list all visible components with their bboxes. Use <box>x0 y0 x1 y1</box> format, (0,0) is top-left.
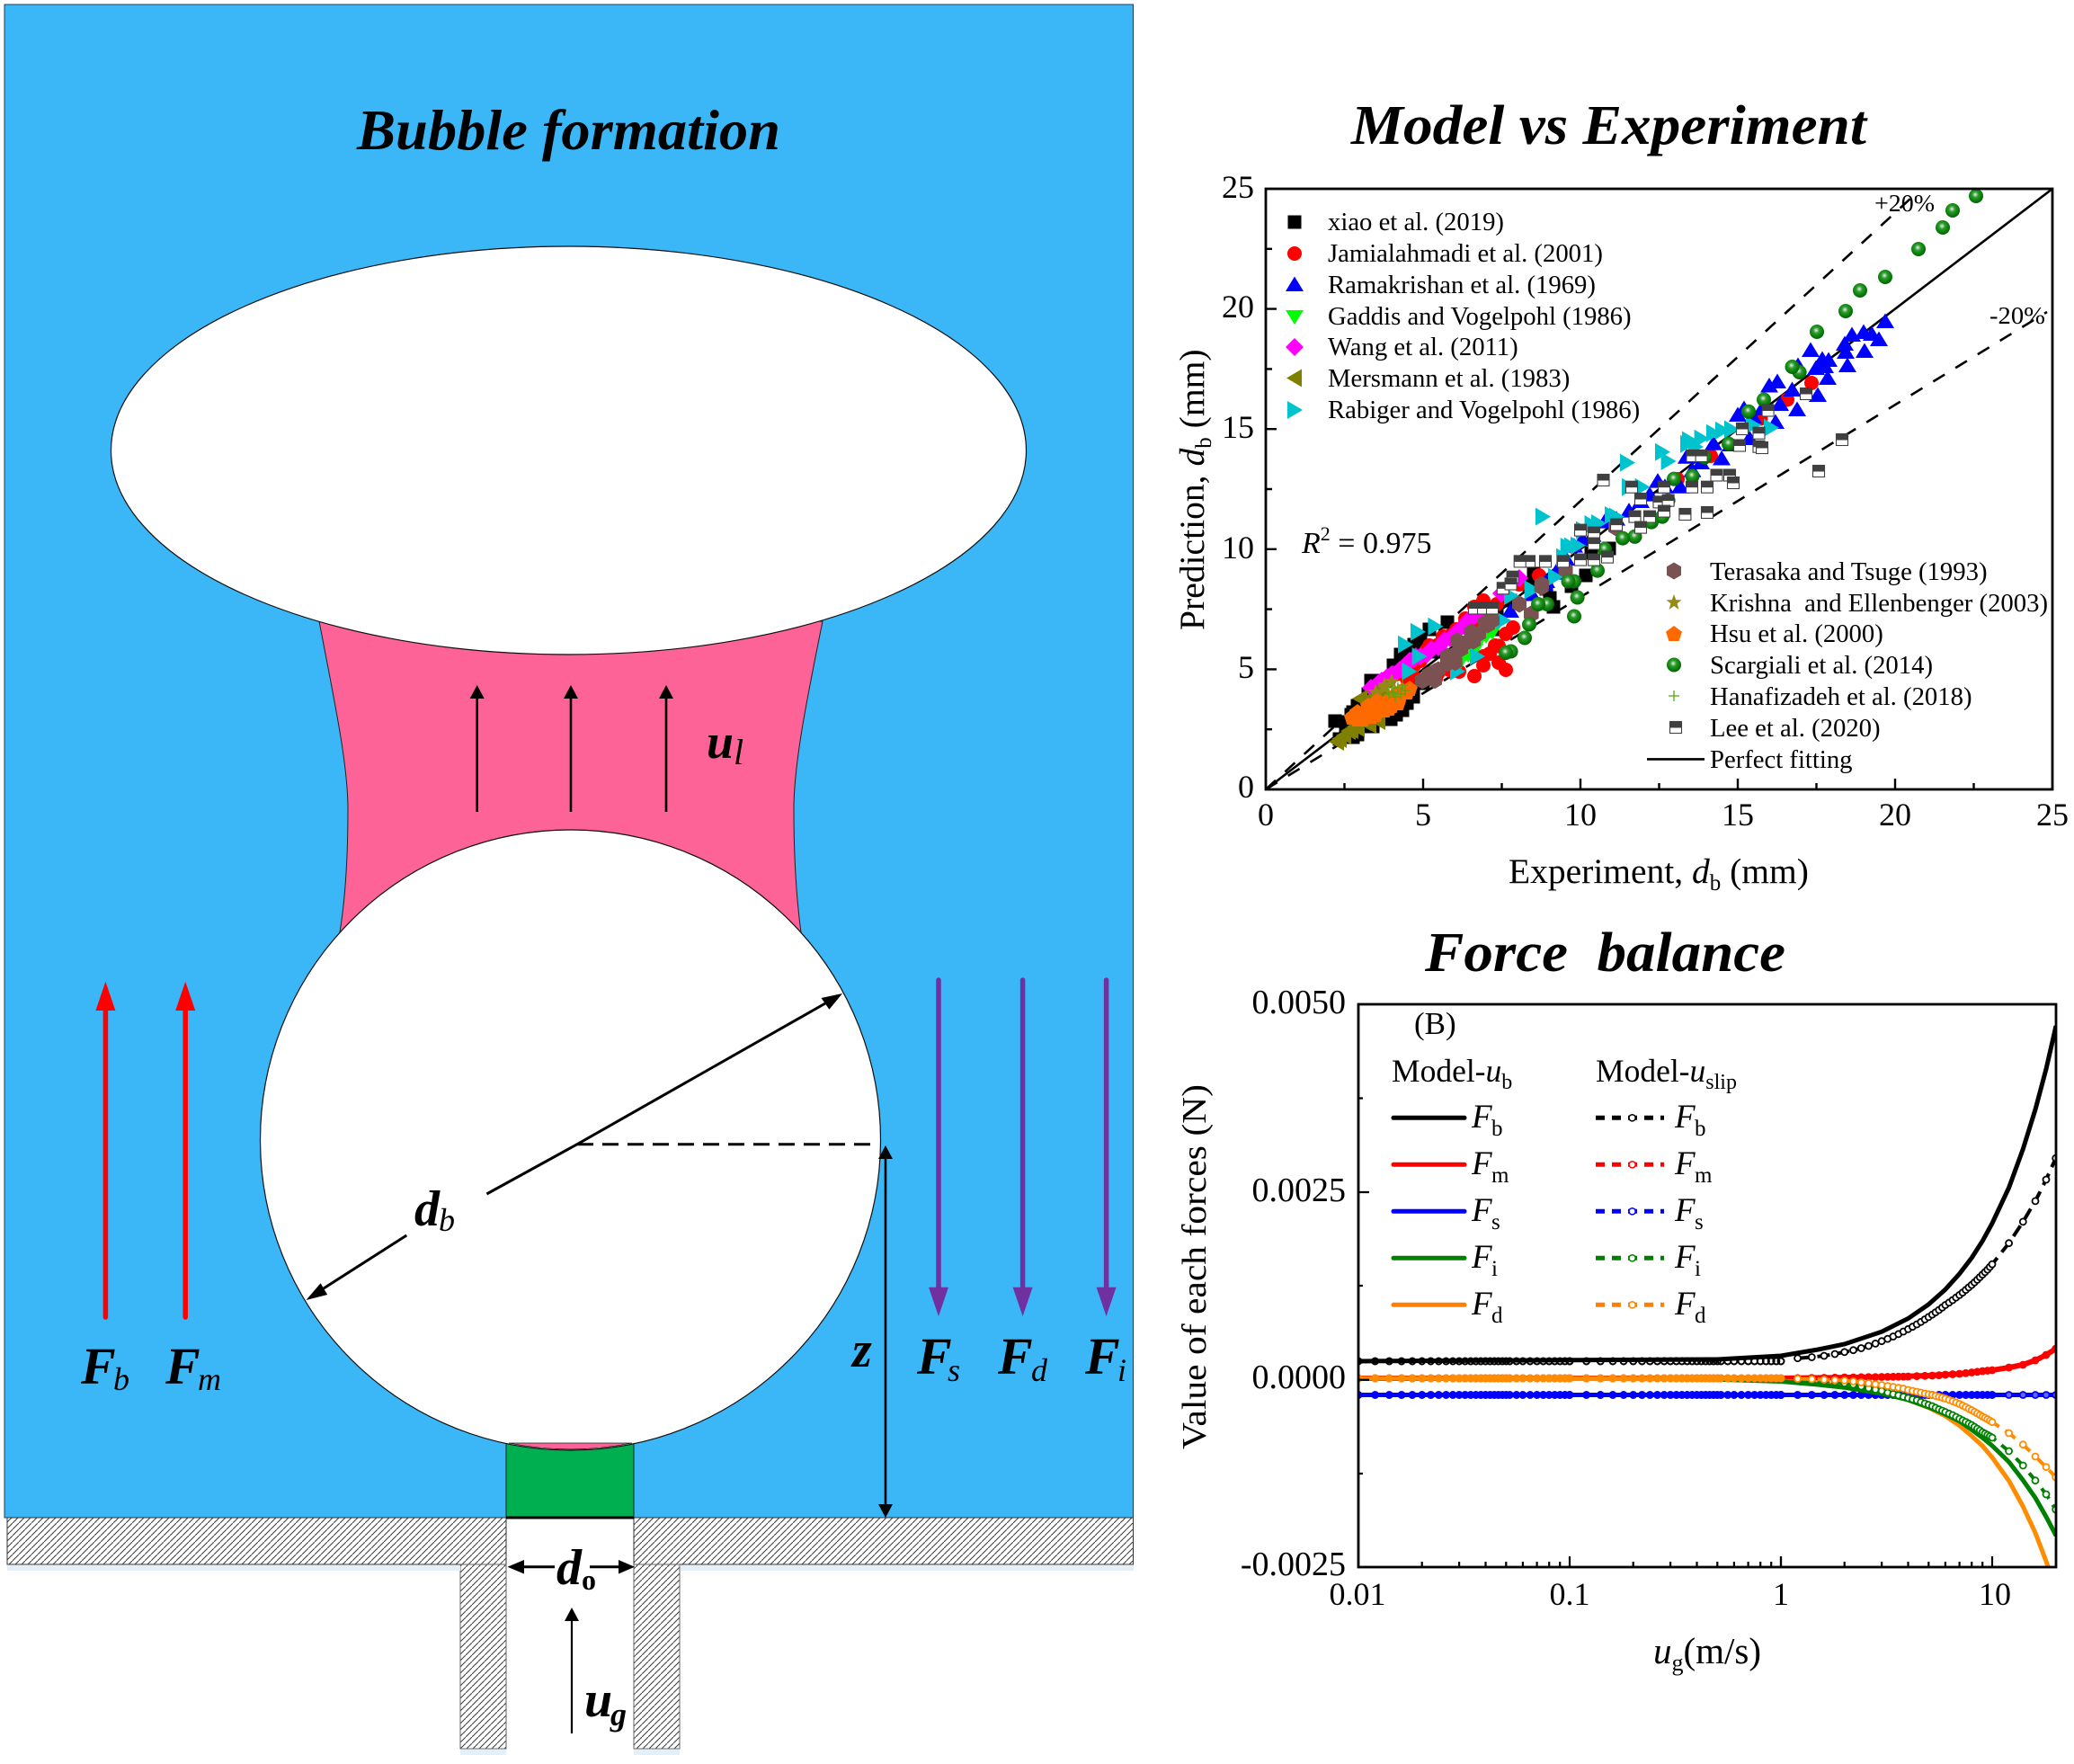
legend: solid lines: F <box>1471 1239 1492 1276</box>
axes frame and ticks <box>1358 1004 2056 1567</box>
series: Hanafizadeh et al. <box>1389 685 1405 697</box>
curve: F_s model-uslip <box>1356 1392 2056 1398</box>
series: Mersmann et al. <box>1337 690 1380 742</box>
y tick labels: 0.0000 <box>1251 1359 1346 1396</box>
curve: F_m model-uslip <box>1356 1349 2056 1381</box>
orifice base line <box>506 1516 634 1519</box>
arrow: orifice diameter <box>507 1560 635 1573</box>
curve: F_d model-ub <box>1379 1379 2050 1566</box>
x axis title: g <box>1672 1650 1683 1676</box>
curve: F_b model-ub <box>1358 1026 2056 1361</box>
x axis title: u <box>1653 1630 1672 1671</box>
x axis title: Experiment, d <box>1509 851 1710 891</box>
label: u_g: u <box>584 1672 612 1728</box>
dashed bubble radius <box>577 1143 872 1145</box>
scatter chart: model vs experiment <box>1172 169 2069 895</box>
pink lens at orifice <box>509 1443 632 1449</box>
liquid film neck <box>319 621 823 932</box>
legend: upper left: xiao et al. (2019) <box>1328 208 1504 236</box>
legend: solid lines: F <box>1471 1286 1492 1323</box>
arrows: F_b and F_m upward forces <box>95 982 195 1317</box>
curve: F_i model-uslip <box>1798 1379 2056 1510</box>
legend: dashed lines with circles: m <box>1695 1163 1713 1188</box>
label: u_g: g <box>610 1697 627 1733</box>
panel: bubble formation schematic <box>4 4 1134 1752</box>
legend: dashed lines with circles: F <box>1674 1286 1696 1323</box>
label: +20%: +20% <box>1874 190 1935 217</box>
gas inlet green region <box>506 1443 634 1518</box>
x tick labels <box>1258 797 2069 833</box>
label: -20%: -20% <box>1989 302 2045 329</box>
curve: F_d model-uslip <box>1356 1376 2056 1477</box>
legend: dashed lines with circles: s <box>1695 1210 1704 1234</box>
label: F_b: b <box>113 1361 129 1397</box>
label: d_o: d <box>556 1540 583 1596</box>
x tick labels <box>1329 1576 2011 1612</box>
y axis title: b <box>1192 437 1216 449</box>
legend: dashed lines with circles: b <box>1695 1117 1706 1141</box>
label: F_i: i <box>1117 1352 1126 1388</box>
legend: solid lines: F <box>1471 1192 1492 1229</box>
arrow: height z <box>878 1145 893 1518</box>
legend heading: Model-ub: b <box>1501 1071 1512 1094</box>
series: Scargiali et al. <box>1506 196 1976 653</box>
y axis title: (mm) <box>1172 349 1212 437</box>
arrows: liquid velocity <box>470 685 673 812</box>
x axis title: (m/s) <box>1683 1630 1761 1671</box>
legend: dashed lines with circles: d <box>1695 1304 1706 1328</box>
label: F_i: F <box>1084 1327 1120 1385</box>
legend: dashed lines with circles: F <box>1674 1192 1696 1229</box>
label: F_m: m <box>198 1361 221 1397</box>
legend: lower right: Hanafizadeh et al. (2018) <box>1710 682 1972 711</box>
legend: upper left: Ramakrishan et al. (1969) <box>1328 271 1596 299</box>
legend: lower right: Hsu et al. (2000) <box>1710 619 1883 648</box>
y tick labels: 0.0025 <box>1251 1172 1346 1209</box>
legend heading: Model-uslip: Model-u <box>1596 1053 1705 1089</box>
wall: plate right <box>634 1518 1133 1564</box>
legend: lower right: Scargiali et al. (2014) <box>1710 651 1933 680</box>
label: u_l: u <box>707 715 734 769</box>
series: Gaddis and Vogelpohl <box>1461 632 1492 661</box>
series: Jamialahmadi et al. <box>1389 383 1811 681</box>
label: F_b: F <box>80 1337 116 1395</box>
x tick labels: 1 <box>1773 1576 1789 1612</box>
legend: solid lines: d <box>1491 1304 1503 1328</box>
arrow: gas velocity <box>565 1608 579 1733</box>
y axis title: Prediction, d <box>1172 449 1212 630</box>
wall: plate left <box>7 1518 506 1564</box>
x axis title: (mm) <box>1721 851 1809 891</box>
liquid background <box>4 4 1133 1518</box>
y tick labels: 20 <box>1222 289 1254 325</box>
line chart: force balance <box>1176 984 2056 1676</box>
legend: lower right: Lee et al. (2020) <box>1710 714 1881 743</box>
y tick labels: 15 <box>1222 409 1254 445</box>
legend: upper left <box>1286 208 1640 424</box>
wall soft shadows <box>7 1568 1134 1752</box>
curve: F_b model-uslip <box>1356 1158 2056 1365</box>
curve: F_i model-ub <box>1708 1379 2056 1536</box>
label: d_o: o <box>582 1564 596 1596</box>
label: F_s: F <box>916 1327 952 1385</box>
label: u_l: l <box>734 732 743 772</box>
legend: dashed lines with circles: F <box>1674 1145 1696 1182</box>
legend: dashed lines with circles: F <box>1674 1099 1696 1136</box>
arrow: bubble diameter <box>306 993 842 1300</box>
x axis title: b <box>1710 871 1721 895</box>
nozzle right wall <box>634 1564 680 1749</box>
x tick labels: 0.01 <box>1329 1576 1386 1612</box>
x tick labels: 5 <box>1415 797 1431 833</box>
series: Rabiger and Vogelpohl <box>1405 425 1771 672</box>
legend: upper left: Jamialahmadi et al. (2001) <box>1328 239 1603 268</box>
y tick labels: 0 <box>1238 769 1254 805</box>
y tick labels <box>1222 169 1254 805</box>
legend: dashed lines with circles <box>1596 1099 1713 1328</box>
label: d_b: d <box>414 1181 441 1237</box>
y tick labels: 25 <box>1222 169 1254 205</box>
legend: solid lines: m <box>1491 1163 1509 1188</box>
label: R squared: = 0.975 <box>1331 527 1431 560</box>
upper detached bubble <box>111 246 1027 655</box>
x tick labels: 10 <box>1564 797 1597 833</box>
y tick labels: 5 <box>1238 649 1254 685</box>
curves <box>1356 1026 2056 1591</box>
panel letter: (B) <box>1414 1006 1456 1041</box>
title: Model vs Experiment: Model vs Experiment <box>1350 95 1868 156</box>
legend: lower right: Krishna and Ellenbenger (2003) <box>1710 589 2048 618</box>
series: Krishna and Ellenbenger <box>1375 682 1398 699</box>
series: Lee et al. <box>1474 394 1842 608</box>
series: Wang et al. <box>1371 578 1519 688</box>
legend: upper left: Gaddis and Vogelpohl (1986) <box>1328 302 1632 331</box>
legend: dashed lines with circles: F <box>1674 1239 1696 1276</box>
label: z: z <box>850 1323 872 1378</box>
series: Terasaka and Tsuge <box>1422 528 1616 681</box>
legend: lower right: Terasaka and Tsuge (1993) <box>1710 557 1988 586</box>
arrows: F_s, F_d, F_i downward forces <box>929 980 1117 1316</box>
y tick labels: 0.0050 <box>1251 984 1346 1021</box>
legend: solid lines: F <box>1471 1145 1492 1182</box>
curve: F_s model-ub <box>1358 1393 2056 1397</box>
label: R squared: R <box>1301 527 1321 560</box>
y tick labels: 10 <box>1222 530 1254 566</box>
reference lines <box>1266 189 2052 789</box>
legend: solid lines: s <box>1491 1210 1500 1234</box>
y tick labels <box>1241 984 1346 1583</box>
title: Force balance: Force balance <box>1424 922 1785 984</box>
series: Ramakrishan et al. <box>1510 322 1885 611</box>
label: F_d: d <box>1031 1352 1048 1388</box>
axes frame and ticks <box>1266 189 2052 789</box>
x tick labels: 25 <box>2036 797 2069 833</box>
title: Bubble formation: Bubble formation <box>356 98 780 162</box>
x tick labels: 0 <box>1258 797 1274 833</box>
x tick labels: 20 <box>1879 797 1911 833</box>
legend: lower right: Perfect fitting <box>1710 745 1853 774</box>
series: Hsu et al. <box>1352 689 1410 719</box>
nozzle left wall <box>460 1564 506 1749</box>
series: xiao et al. <box>1335 548 1609 739</box>
legend: solid lines <box>1393 1099 1509 1328</box>
legend: dashed lines with circles: i <box>1695 1257 1701 1281</box>
legend: upper left: Mersmann et al. (1983) <box>1328 364 1570 393</box>
label: R squared: 2 <box>1321 522 1331 545</box>
x tick labels: 0.1 <box>1550 1576 1589 1612</box>
legend: upper left: Wang et al. (2011) <box>1328 333 1518 361</box>
x tick labels: 15 <box>1722 797 1754 833</box>
label: F_d: F <box>997 1327 1033 1385</box>
curve: F_m model-ub <box>1358 1349 2056 1378</box>
legend: solid lines: i <box>1491 1257 1498 1281</box>
x tick labels: 10 <box>1979 1576 2011 1612</box>
legend: upper left: Rabiger and Vogelpohl (1986) <box>1328 396 1640 424</box>
forming bubble <box>261 830 881 1450</box>
legend: solid lines: F <box>1471 1099 1492 1136</box>
label: F_s: s <box>948 1352 960 1388</box>
y tick labels: -0.0025 <box>1241 1546 1346 1583</box>
legend heading: Model-uslip: slip <box>1705 1071 1737 1094</box>
legend: lower right <box>1647 557 2048 774</box>
y axis title: Value of each forces (N) <box>1176 1084 1214 1449</box>
legend heading: Model-ub: Model-u <box>1392 1053 1501 1089</box>
legend: solid lines: b <box>1491 1117 1503 1141</box>
label: F_m: F <box>165 1337 200 1395</box>
label: d_b: b <box>439 1202 455 1238</box>
